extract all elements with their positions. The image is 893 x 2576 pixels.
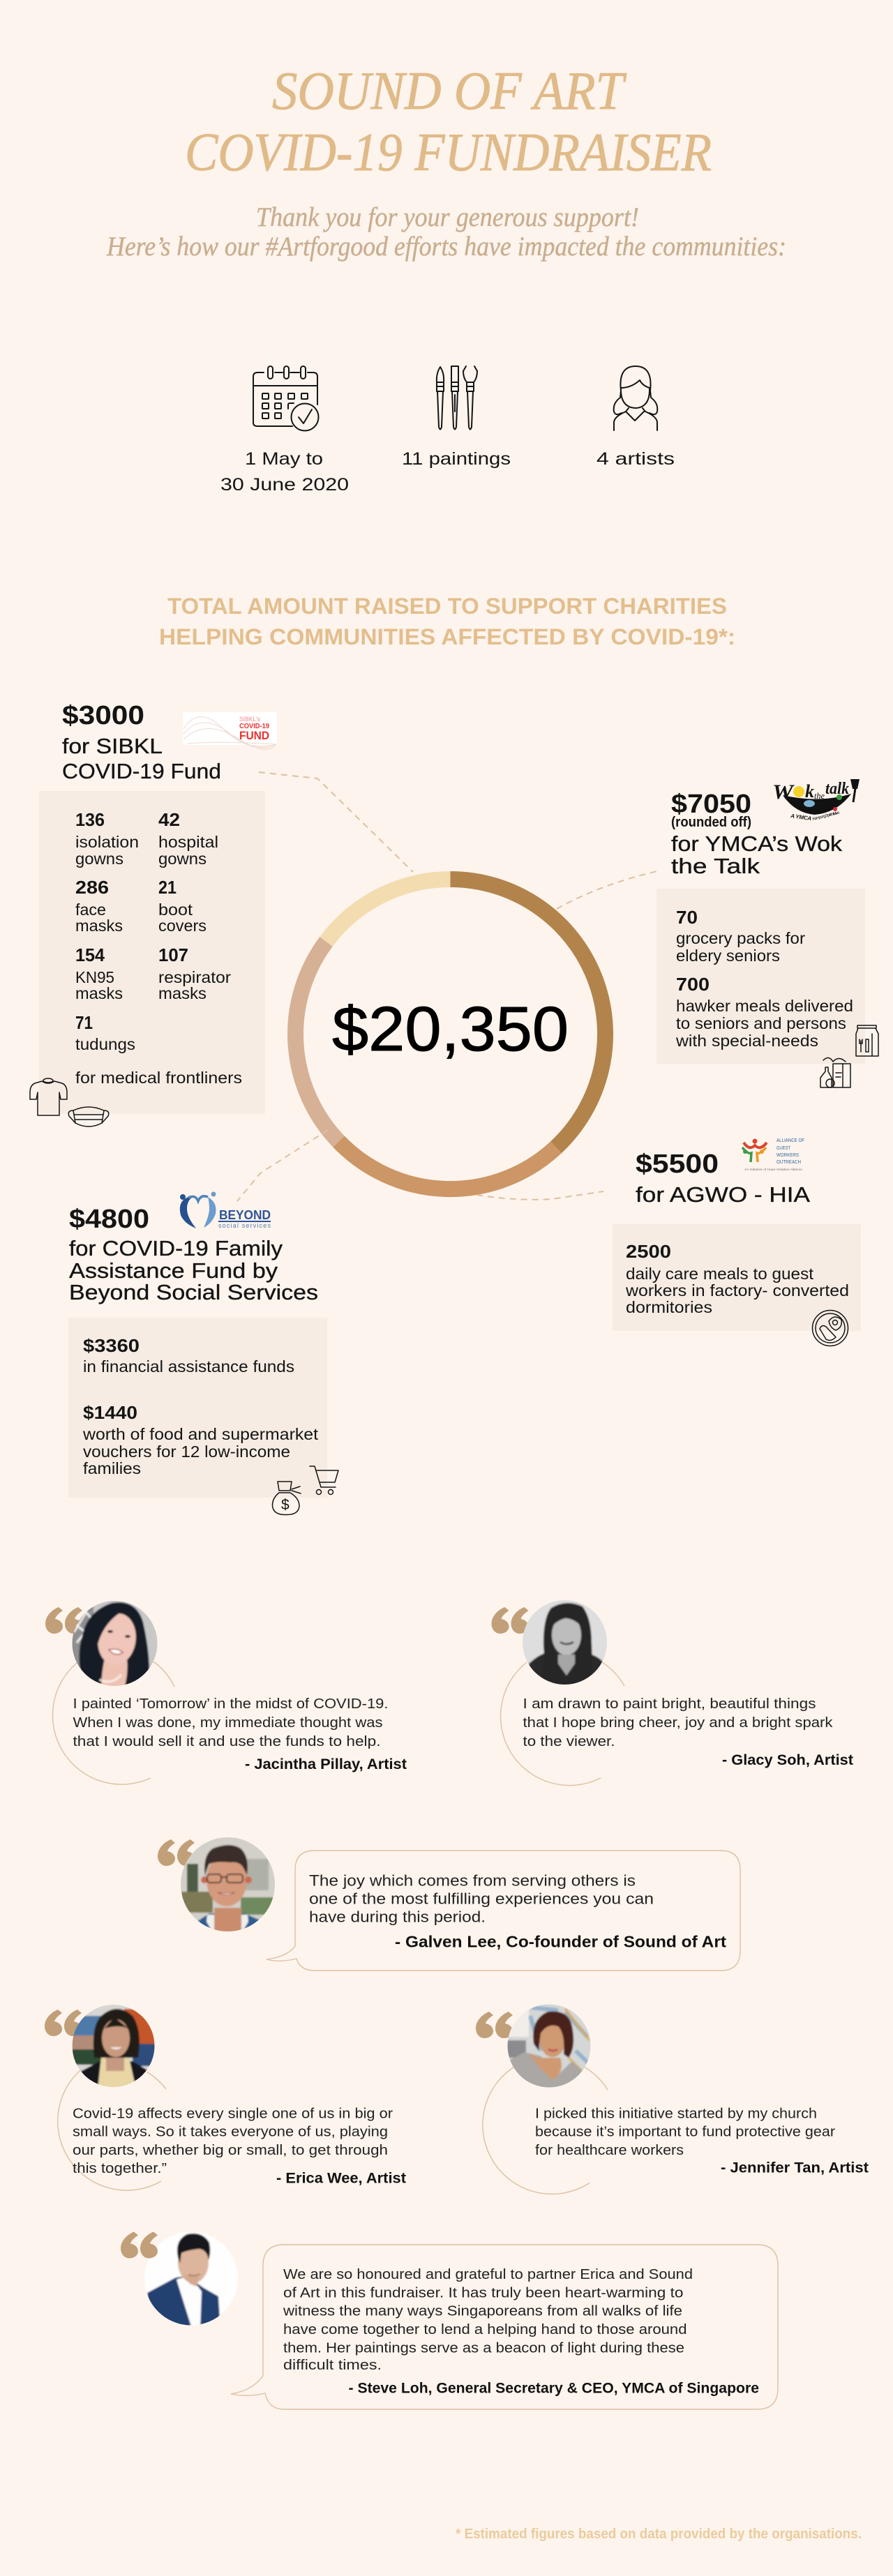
testimonial: Jacintha Pillay xyxy=(45,1597,407,1784)
item: vouchers: families xyxy=(83,1459,141,1477)
title: SOUND OF ART xyxy=(272,61,627,121)
item: tudungs xyxy=(75,1012,135,1053)
quote text: that I hope bring cheer, joy and a bright spark xyxy=(523,1715,834,1731)
quote text: our parts, whether big or small, to get through xyxy=(73,2143,388,2158)
quote text: of Art in this fundraiser. It has truly been heart-warming to xyxy=(283,2285,684,2300)
logo: AGWO: OUTREACH xyxy=(776,1160,801,1165)
panel heading: for COVID-19 Family xyxy=(69,1236,283,1260)
connector: Beyond xyxy=(237,1130,328,1201)
attribution: - Galven Lee, Co-founder of Sound of Art xyxy=(395,1932,726,1950)
testimonial: Glacy Soh xyxy=(491,1597,853,1786)
quote mark xyxy=(476,2012,513,2038)
speech circle xyxy=(58,2070,166,2190)
icon: person xyxy=(614,366,657,430)
subtitle: Thank you for your generous support! xyxy=(256,202,639,232)
item: hospital gowns: hospital xyxy=(158,833,218,851)
note: medical frontliners: for medical frontliners xyxy=(75,1069,242,1087)
quote text xyxy=(283,2267,693,2373)
panel heading: $4800 xyxy=(69,1205,149,1234)
panel heading: $5500 xyxy=(636,1150,719,1179)
photo xyxy=(143,2231,239,2328)
logo: AGWO: ALLIANCE OF xyxy=(776,1138,804,1143)
panel heading: for AGWO - HIA xyxy=(636,1182,810,1207)
panel heading: for SIBKL xyxy=(62,734,163,758)
item: grocery packs xyxy=(676,907,805,965)
logo: SIBKL fund: COVID-19 xyxy=(239,723,269,730)
photo xyxy=(181,1837,275,1931)
item: financial assistance xyxy=(83,1335,294,1376)
item: respirator masks xyxy=(158,944,231,1002)
connector: SIBKL xyxy=(259,772,413,872)
title xyxy=(185,61,712,182)
quote text xyxy=(73,1696,388,1749)
item: vouchers xyxy=(82,1402,319,1477)
item: grocery packs: 70 xyxy=(676,907,698,928)
speech circle xyxy=(52,1662,174,1784)
item: face masks: face xyxy=(75,901,106,919)
testimonial: Erica Wee xyxy=(45,2002,406,2190)
photo xyxy=(523,1600,607,1685)
attribution: - Jacintha Pillay, Artist xyxy=(245,1756,407,1772)
connector: AGWO xyxy=(476,1191,603,1200)
quote text: them. Her paintings serve as a beacon of light during these xyxy=(283,2341,684,2356)
quote text: this together.” xyxy=(73,2161,167,2176)
testimonial: Galven Lee xyxy=(158,1835,740,1971)
quote text: Covid-19 affects every single one of us in big or xyxy=(73,2107,393,2122)
item: isolation gowns: isolation xyxy=(75,833,139,851)
panel heading xyxy=(62,701,221,783)
panel: AGWO HIA xyxy=(613,1138,861,1346)
logo: Beyond: social services xyxy=(218,1222,271,1229)
logo: Wok the Talk: talk xyxy=(825,780,849,798)
icon: shopping cart xyxy=(310,1466,338,1494)
attribution: - Jennifer Tan, Artist xyxy=(721,2160,869,2176)
quote text: I am drawn to paint bright, beautiful things xyxy=(523,1696,816,1712)
panel: YMCA Wok the Talk xyxy=(656,779,878,1087)
icon: money bag: $ xyxy=(281,1497,290,1513)
item: tudungs: 71 xyxy=(75,1012,93,1033)
logo: SIBKL fund: SIBKL's xyxy=(239,716,260,723)
quote mark xyxy=(45,1607,82,1634)
item: respirator masks: masks xyxy=(158,984,207,1002)
item: respirator masks: respirator xyxy=(158,968,231,986)
panel heading: Assistance Fund by xyxy=(69,1258,278,1283)
item: isolation gowns xyxy=(75,809,139,868)
icon: meal plate xyxy=(812,1310,848,1346)
icon: calendar xyxy=(253,366,318,431)
item: hawker meals xyxy=(675,974,853,1050)
photo xyxy=(73,2005,155,2087)
quote text xyxy=(73,2107,393,2176)
attribution: - Steve Loh, General Secretary & CEO, YMCA of Singapore xyxy=(349,2380,759,2397)
item: tudungs: tudungs xyxy=(75,1035,135,1053)
icon: takeaway bag xyxy=(856,1025,878,1056)
quote text: to the viewer. xyxy=(523,1734,615,1749)
heading: total amount raised xyxy=(159,594,735,649)
quote mark xyxy=(45,2010,82,2036)
photo xyxy=(508,2005,590,2087)
item: daily care meals: daily care meals to guest xyxy=(626,1265,814,1283)
item: face masks xyxy=(75,877,123,935)
donut total: $20,350 xyxy=(332,995,569,1064)
subtitle xyxy=(106,202,786,262)
item: daily care meals: dormitories xyxy=(626,1298,712,1316)
speech bubble xyxy=(267,1851,740,1971)
logo: Wok the Talk: A YMCA xyxy=(790,813,812,822)
photo xyxy=(73,1601,158,1686)
logo: AGWO: GUEST xyxy=(776,1146,791,1151)
panel background xyxy=(613,1224,861,1331)
item: hawker meals: to seniors and persons xyxy=(676,1014,846,1032)
item: KN95 masks: 154 xyxy=(75,944,105,965)
panel heading: $3000 xyxy=(62,701,144,730)
item: hawker meals: hawker meals delivered xyxy=(676,997,853,1015)
panel heading: for YMCA’s Wok xyxy=(671,831,843,856)
logo: AGWO xyxy=(742,1138,804,1171)
panel: SIBKL xyxy=(30,701,277,1127)
speech circle xyxy=(483,2067,608,2194)
item: boot covers: 21 xyxy=(158,877,177,898)
item: grocery packs: grocery packs for xyxy=(676,929,805,947)
quote text: have during this period. xyxy=(309,1908,486,1925)
segment: SIBKL 3000 xyxy=(327,879,451,942)
logo: SIBKL fund xyxy=(183,712,277,749)
panel background xyxy=(39,791,265,1114)
panel heading: COVID-19 Fund xyxy=(62,759,221,783)
heading: total amount raised: TOTAL AMOUNT RAISED TO SUPPORT CHARITIES xyxy=(167,594,727,619)
panel heading xyxy=(636,1150,810,1207)
item: financial assistance: $3360 xyxy=(83,1335,140,1356)
quote text: for healthcare workers xyxy=(535,2143,684,2158)
title: COVID-19 FUNDRAISER xyxy=(185,122,712,182)
item: isolation gowns: 136 xyxy=(75,809,105,830)
logo: Wok the Talk: Kampung Spirit Initiative xyxy=(812,811,841,822)
stat: dates: 1 May to xyxy=(245,449,323,469)
icon: mask xyxy=(68,1107,109,1127)
quote text xyxy=(309,1872,654,1925)
panel heading: (rounded off) xyxy=(671,815,751,830)
item: daily care meals xyxy=(625,1241,849,1316)
item: hospital gowns: 42 xyxy=(158,809,180,830)
heading: total amount raised: HELPING COMMUNITIES AFFECTED BY COVID-19*: xyxy=(159,624,735,649)
item: KN95 masks: masks xyxy=(75,984,123,1002)
item: boot covers xyxy=(158,877,207,935)
quote text: We are so honoured and grateful to partner Erica and Sound xyxy=(283,2267,693,2282)
logo: AGWO: WORKERS xyxy=(776,1153,799,1158)
stat: artists: 4 artists xyxy=(596,449,675,469)
stat: dates xyxy=(220,366,349,495)
logo: Wok the Talk xyxy=(772,779,860,822)
panel heading xyxy=(69,1205,318,1304)
segment: AGWO 5500 xyxy=(339,1141,556,1189)
item: vouchers: $1440 xyxy=(83,1402,137,1423)
quote text xyxy=(523,1696,834,1749)
attribution: - Erica Wee, Artist xyxy=(276,2171,406,2186)
quote text: that I would sell it and use the funds to help. xyxy=(73,1734,381,1749)
icon: brushes xyxy=(437,366,477,430)
connector: YMCA xyxy=(557,871,657,909)
logo: Beyond: BEYOND xyxy=(219,1208,271,1222)
quote text: When I was done, my immediate thought was xyxy=(73,1715,382,1731)
testimonial: Steve Loh xyxy=(121,2231,778,2409)
panel background xyxy=(68,1318,327,1498)
item: hospital gowns: gowns xyxy=(158,850,207,868)
panel heading: Beyond Social Services xyxy=(69,1280,318,1304)
quote text: small ways. So it takes everyone of us, playing xyxy=(73,2125,388,2140)
quote mark xyxy=(158,1839,195,1866)
panel heading xyxy=(671,790,843,878)
segment: YMCA 7050 xyxy=(451,879,606,1147)
attribution: - Glacy Soh, Artist xyxy=(722,1752,853,1768)
item: face masks: 286 xyxy=(75,877,109,898)
quote mark xyxy=(491,1607,529,1634)
quote mark xyxy=(121,2232,158,2259)
stat: artists xyxy=(596,366,675,469)
speech bubble xyxy=(231,2245,778,2409)
donut chart xyxy=(296,879,606,1189)
stat: dates: 30 June 2020 xyxy=(220,475,349,495)
item: hawker meals: 700 xyxy=(676,974,710,995)
item: daily care meals: 2500 xyxy=(626,1241,671,1262)
item: hawker meals: with special-needs xyxy=(675,1032,818,1050)
quote text: witness the many ways Singaporeans from all walks of life xyxy=(283,2303,682,2319)
item: daily care meals: workers in factory- converted xyxy=(625,1281,849,1300)
icon: groceries xyxy=(820,1057,850,1087)
quote text: I picked this initiative started by my church xyxy=(535,2107,817,2122)
item: hospital gowns xyxy=(158,809,218,868)
segment: Beyond 4800 xyxy=(296,942,339,1141)
item: KN95 masks xyxy=(75,944,123,1002)
icon: money bag xyxy=(272,1482,301,1515)
item: grocery packs: eldery seniors xyxy=(676,947,780,965)
logo: SIBKL fund: FUND xyxy=(239,729,269,742)
stat: paintings: 11 paintings xyxy=(402,449,511,469)
logo: Beyond xyxy=(180,1191,271,1229)
item: face masks: masks xyxy=(75,917,123,935)
panel background xyxy=(656,889,865,1064)
quote text: The joy which comes from serving others is xyxy=(309,1872,636,1889)
footnote: * Estimated figures based on data provided by the organisations. xyxy=(456,2526,862,2542)
quote text: have come together to lend a helping hand to those around xyxy=(283,2322,686,2337)
quote text: one of the most fulfilling experiences you can xyxy=(309,1890,654,1907)
quote text: I painted ‘Tomorrow’ in the midst of COVID-19. xyxy=(73,1696,388,1712)
subtitle: Here’s how our #Artforgood efforts have impacted the communities: xyxy=(106,232,786,262)
speech circle xyxy=(501,1662,624,1786)
stat: paintings xyxy=(402,366,511,469)
icon: gown xyxy=(30,1078,67,1115)
item: financial assistance: in financial assistance funds xyxy=(83,1357,294,1376)
item: respirator masks: 107 xyxy=(158,944,188,965)
item: isolation gowns: gowns xyxy=(75,850,123,868)
panel: Beyond Social Services xyxy=(68,1191,338,1515)
item: boot covers: boot xyxy=(158,901,193,919)
item: vouchers: vouchers for 12 low-income xyxy=(83,1443,290,1461)
quote text xyxy=(535,2107,835,2158)
panel heading: the Talk xyxy=(671,854,760,878)
logo: Wok the Talk: k xyxy=(805,781,814,801)
item: boot covers: covers xyxy=(158,917,207,935)
item: KN95 masks: KN95 xyxy=(75,968,114,986)
logo: Wok the Talk: the xyxy=(814,790,825,801)
panel heading: $7050 xyxy=(671,790,751,819)
testimonial: Jennifer Tan xyxy=(476,2002,869,2194)
logo: Wok the Talk: W xyxy=(772,781,795,804)
item: vouchers: worth of food and supermarket xyxy=(82,1425,319,1443)
logo: AGWO: An Initiative of Hope Initiative Alliance xyxy=(744,1168,803,1171)
quote text: because it’s important to fund protective gear xyxy=(535,2125,835,2140)
quote text: difficult times. xyxy=(283,2358,382,2373)
